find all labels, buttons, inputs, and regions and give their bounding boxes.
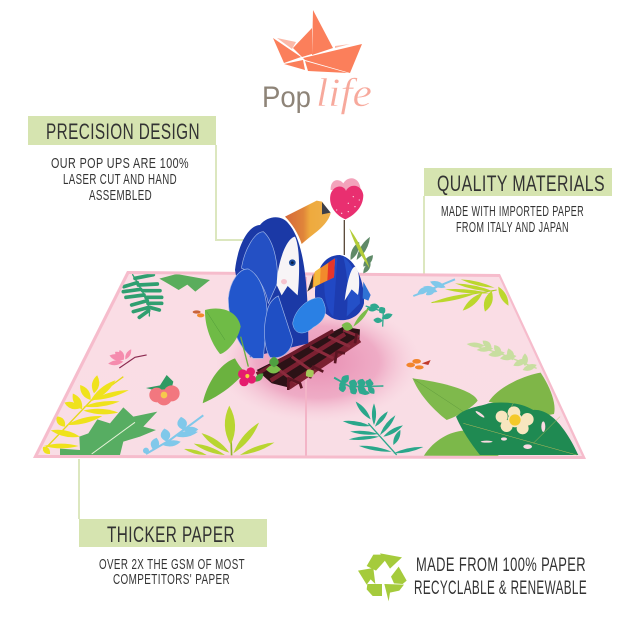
callout: recyclable [358, 553, 587, 601]
pink flower [238, 367, 256, 386]
card border [33, 271, 586, 459]
large toucan wing [293, 298, 325, 333]
print: teal sprig [334, 375, 384, 395]
callout: thicker paper: THICKER PAPER [107, 522, 235, 547]
callout: precision design: LASER CUT AND HAND [63, 171, 177, 188]
print: teal palm [342, 400, 424, 455]
logo word Pop: Pop [262, 81, 311, 114]
icon: recycle arrows [358, 553, 407, 601]
large toucan face [277, 237, 299, 295]
callout: quality materials [424, 168, 612, 236]
print: cream flower [496, 406, 534, 434]
callout: thicker paper: OVER 2X THE GSM OF MOST [99, 556, 245, 573]
print: salmon flower [146, 375, 180, 405]
print: lime plant [184, 405, 275, 457]
print: dark green fern [123, 275, 162, 317]
small foliage on stand [253, 306, 371, 384]
print: serrated green leaf [60, 407, 157, 455]
logo: Poplife [262, 10, 372, 115]
balloon [330, 178, 363, 255]
left panel prints [41, 274, 275, 457]
connector lines [79, 145, 424, 519]
print: big green leaves [413, 373, 555, 457]
pink shadow blot [229, 314, 408, 414]
callout: thicker paper: COMPETITORS' PAPER [113, 571, 230, 588]
print: monstera leaf [456, 402, 578, 455]
lattice stand [257, 327, 360, 390]
card inner paper [38, 274, 582, 456]
callout: precision design: PRECISION DESIGN [46, 119, 200, 144]
illustration: pop-up toucans [203, 178, 394, 403]
callout: precision design: OUR POP UPS ARE 100% [51, 155, 189, 172]
print: pale green fern [466, 340, 537, 371]
callout: precision design [28, 116, 216, 204]
print: green star leaf [159, 274, 210, 292]
print: pink butterfly [108, 348, 147, 368]
print: blue fern [143, 415, 203, 454]
print: blue fern top [413, 279, 455, 297]
small toucan beak [307, 258, 335, 292]
right panel prints [334, 278, 578, 457]
icon: origami paper boat [273, 10, 362, 73]
print: small orange butterfly [193, 310, 204, 317]
panel: open pop-up card [33, 178, 586, 459]
large toucan beak [285, 201, 331, 244]
print: yellow palm [41, 375, 129, 456]
teal sprig bottom [334, 377, 383, 396]
heart-shaped green leaf [205, 309, 248, 367]
callout: thicker paper [79, 519, 267, 588]
large toucan feathers [242, 232, 277, 303]
small toucan face [345, 267, 359, 301]
teal sprig behind small toucan [366, 302, 394, 327]
sage leaves behind small toucan [348, 228, 375, 275]
large toucan [228, 201, 331, 358]
print: orange butterfly [406, 359, 431, 369]
logo word life: life [316, 70, 372, 115]
print: lime palm top [430, 279, 508, 312]
lower green leaf [203, 358, 245, 403]
small toucan [307, 255, 371, 320]
centre fold [305, 277, 307, 456]
callout: precision design: ASSEMBLED [89, 187, 152, 204]
